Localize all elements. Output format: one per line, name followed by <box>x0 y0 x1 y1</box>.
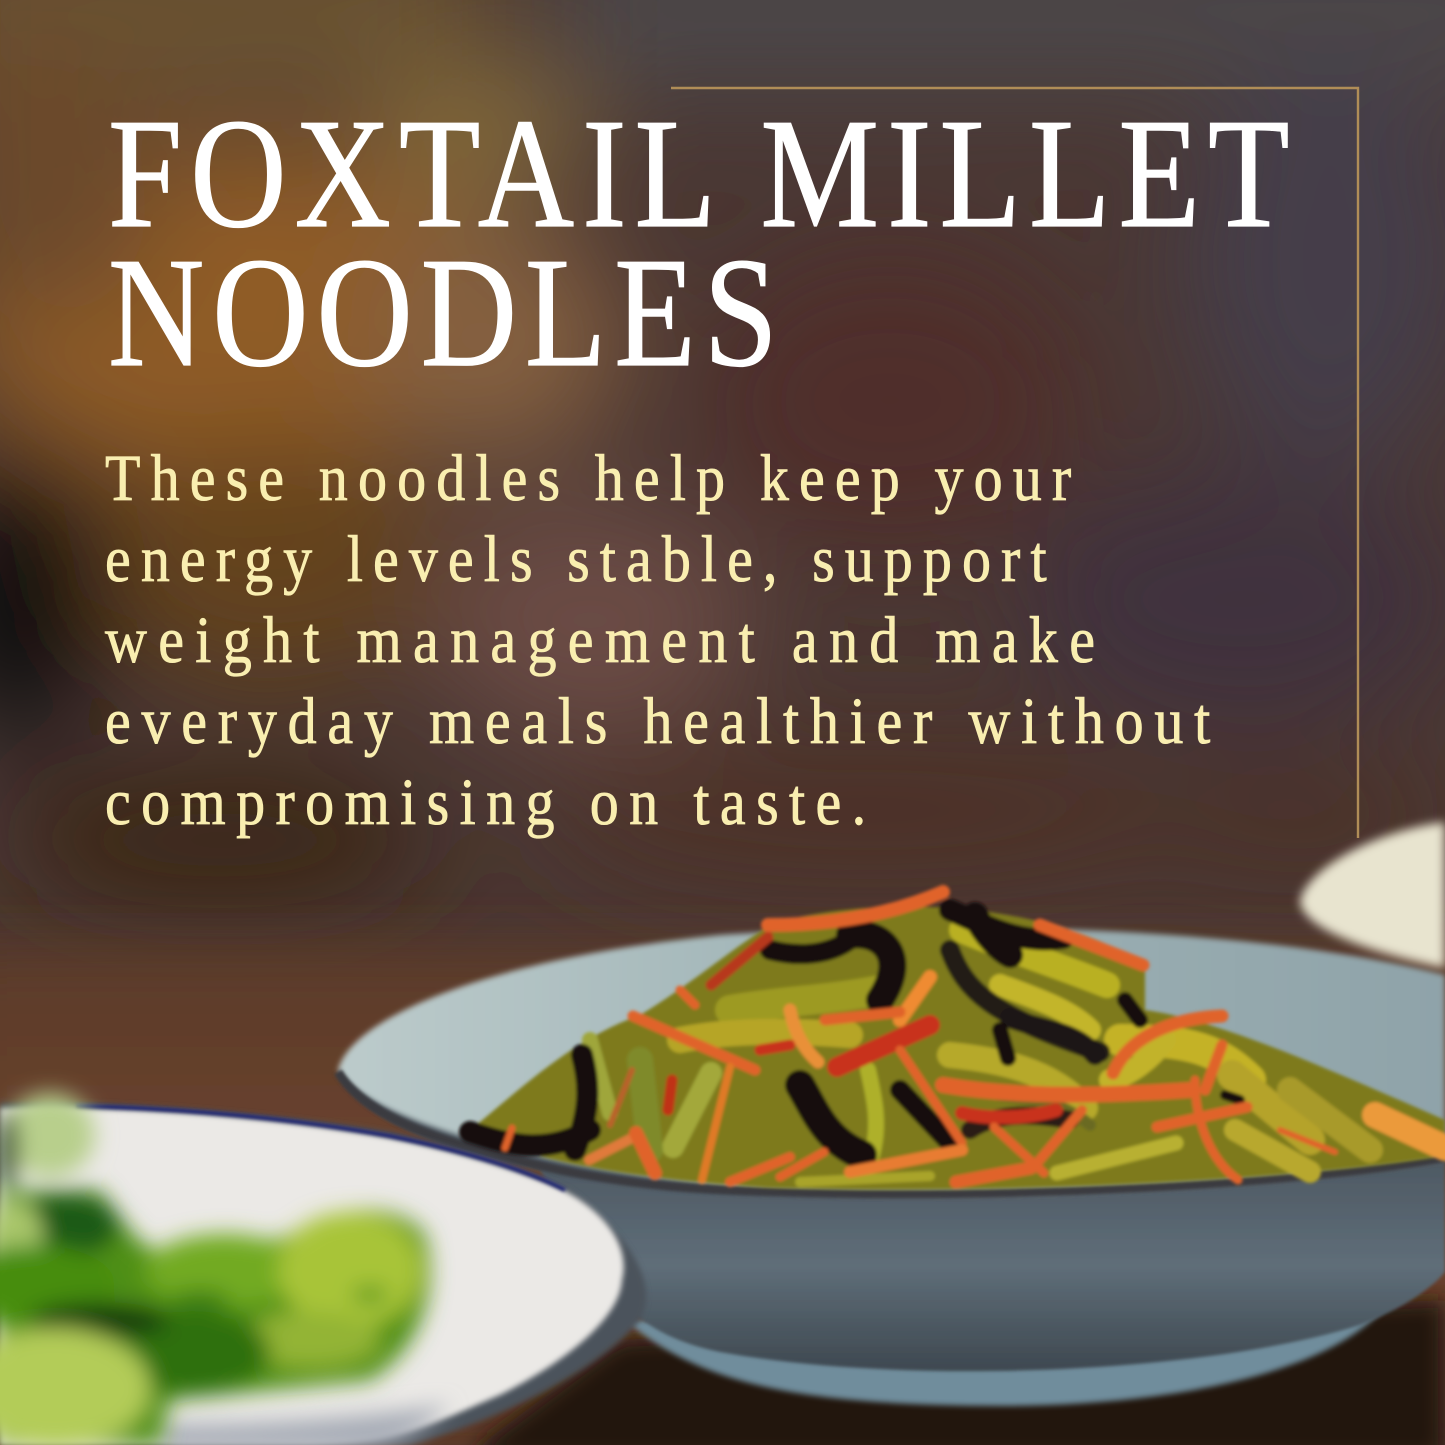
red chili sauce <box>668 937 1056 1117</box>
bowl inner rim <box>338 928 1445 1195</box>
blurred green vegetables <box>0 1093 430 1445</box>
small blurred white bowl, right <box>1300 822 1445 968</box>
decorative gold corner frame <box>671 88 1358 838</box>
main bowl <box>338 928 1445 1406</box>
body text: These noodles help keep your <box>105 442 1071 515</box>
body text: energy levels stable, support <box>105 523 1047 596</box>
body text <box>105 442 1210 839</box>
dark table foreground <box>480 1300 1445 1445</box>
noodle mound base <box>470 907 1445 1190</box>
title: FOXTAIL MILLET <box>108 86 1290 260</box>
title <box>108 86 1290 399</box>
noodle salad <box>470 892 1445 1190</box>
body text: weight management and make <box>105 604 1095 677</box>
plate face <box>0 1108 624 1445</box>
plate underside <box>0 1103 646 1445</box>
plate navy rim <box>76 1106 565 1190</box>
orange carrot strands <box>505 892 1445 1182</box>
bowl outer body <box>338 1070 1445 1371</box>
body text: compromising on taste. <box>105 766 866 839</box>
yellow-green strands <box>590 930 1370 1182</box>
front white plate with greens <box>0 1093 646 1445</box>
plate lower shadow <box>160 1405 450 1445</box>
body text: everyday meals healthier without <box>105 685 1210 758</box>
title: NOODLES <box>108 225 778 399</box>
bowl foot <box>625 1310 1382 1406</box>
dark wood-ear strands <box>470 910 1240 1155</box>
bowl lip, dark edge <box>338 1072 1445 1194</box>
